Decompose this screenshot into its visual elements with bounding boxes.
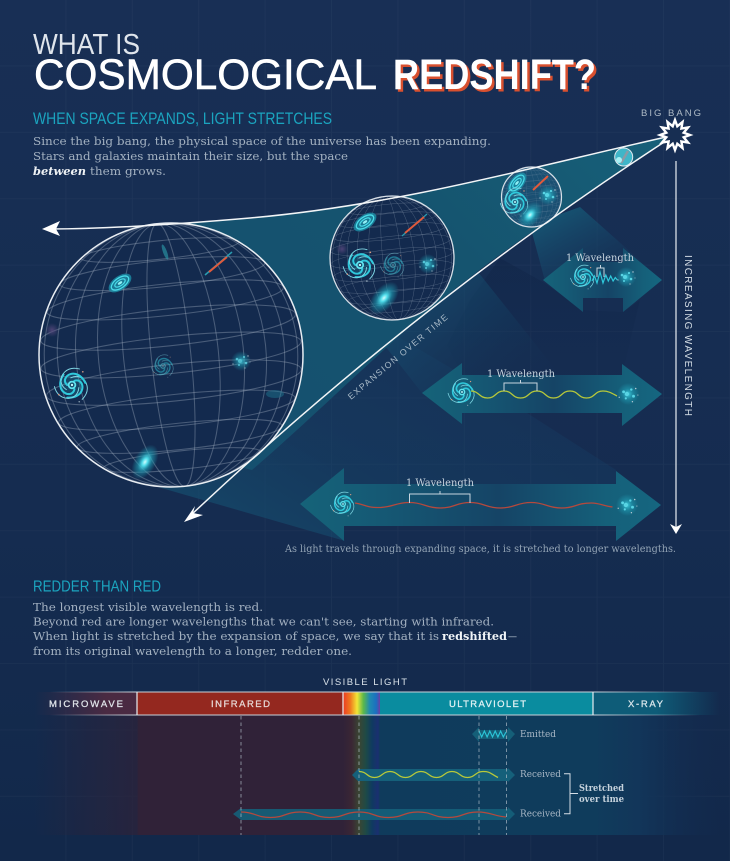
heading: when space expands: WHEN SPACE EXPANDS, LIGHT STRETCHES (33, 110, 332, 128)
bracket: stretched over time (564, 774, 624, 814)
arrow: upper expansion edge (42, 135, 675, 236)
heading: redder than red: REDDER THAN RED (33, 578, 161, 596)
arrow: short wavelength band (543, 248, 662, 312)
arrow: short wavelength band: 1 Wavelength (566, 253, 635, 264)
explanation text: When light is stretched by the expansion of space, we say that it is (33, 629, 439, 643)
title: WHAT IS (33, 29, 140, 61)
arrow: lower expansion edge (184, 135, 675, 522)
label: visible light: VISIBLE LIGHT (323, 677, 407, 688)
received wave arrow: red (233, 807, 515, 821)
label: expansion over time: EXPANSION OVER TIME (346, 312, 450, 402)
expansion cone (143, 135, 675, 470)
caption: As light travels through expanding space, it is stretched to longer wavelengths. (284, 544, 676, 555)
explanation text: — (508, 629, 517, 643)
bracket: stretched over time: over time (579, 794, 624, 805)
arrow: long wavelength band (300, 468, 661, 541)
spectrum bar: MICROWAVE (49, 699, 123, 710)
small sphere (500, 166, 562, 228)
label: big bang: BIG BANG (641, 108, 701, 119)
intro text (33, 134, 491, 178)
big sphere (38, 222, 304, 488)
explanation text (33, 600, 517, 658)
icon: big bang star (660, 120, 690, 150)
explanation text: from its original wavelength to a longer, redder one. (33, 644, 352, 658)
arrow: long wavelength band: 1 Wavelength (406, 478, 475, 489)
title (33, 29, 598, 102)
label: increasing wavelength: INCREASING WAVELENGTH (682, 255, 693, 416)
wave labels: Received (520, 808, 561, 820)
title: COSMOLOGICAL (34, 51, 377, 99)
arrow: medium wavelength band (422, 363, 662, 426)
spectrum bar: X-RAY (628, 699, 664, 710)
wave labels: Emitted (520, 729, 556, 740)
tiny sphere (615, 148, 633, 166)
intro text: Stars and galaxies maintain their size, but the space (33, 149, 348, 163)
bracket: stretched over time: Stretched (579, 783, 624, 794)
spectrum lower zones (35, 715, 720, 835)
title: REDSHIFT? (393, 51, 596, 99)
wave labels: Received (520, 769, 561, 780)
dashed guide lines (241, 716, 506, 835)
title: REDSHIFT? (396, 54, 598, 102)
received wave arrow: yellow (352, 768, 515, 782)
explanation text: The longest visible wavelength is red. (33, 600, 263, 614)
arrow: medium wavelength band: 1 Wavelength (487, 369, 556, 380)
intro text: between (33, 164, 86, 178)
middle sphere (329, 195, 455, 321)
intro text: Since the big bang, the physical space of the universe has been expanding. (33, 134, 491, 148)
spectrum bar (35, 692, 720, 716)
emitted wave arrow (472, 727, 515, 742)
arrow: increasing wavelength (670, 161, 682, 534)
wave labels (520, 729, 561, 820)
intro text: them grows. (90, 164, 166, 178)
light beams from spheres to arrows (158, 207, 662, 541)
spectrum bar: INFRARED (211, 699, 270, 710)
explanation text: redshifted (442, 629, 507, 643)
explanation text: Beyond red are longer wavelengths that we can't see, starting with infrared. (33, 614, 494, 628)
spectrum bar: ULTRAVIOLET (449, 699, 526, 710)
